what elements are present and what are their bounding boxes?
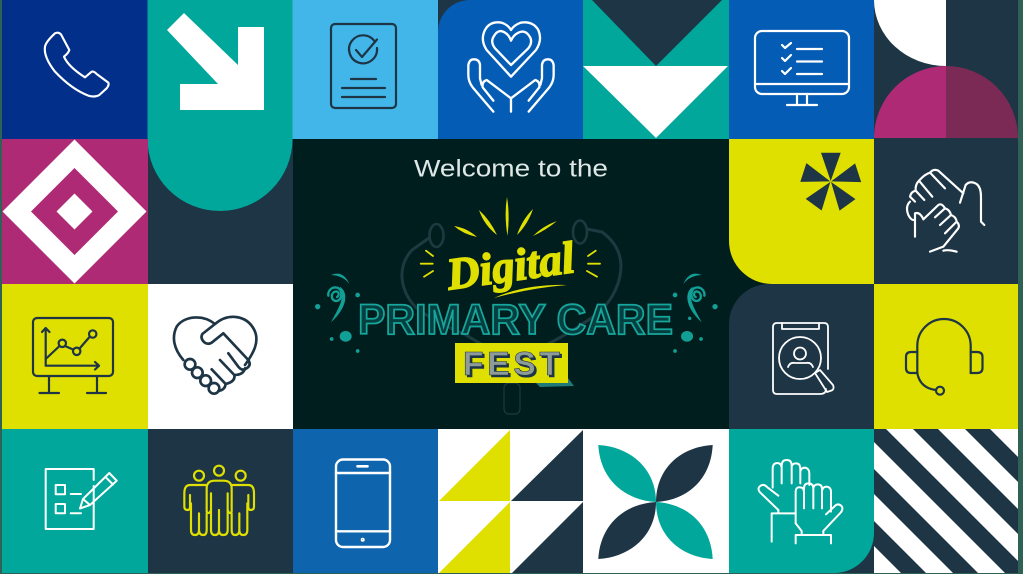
text: Digital script: Digital (443, 232, 578, 300)
tile: document check (292, 0, 438, 139)
icon: headset with microphone (906, 319, 982, 395)
icon: handshake forming a heart (174, 317, 256, 394)
tile: headset (874, 284, 1018, 429)
icon: monitor with checklist (755, 31, 849, 105)
icon: line chart on presentation board (33, 318, 113, 393)
icon: three people outline (184, 466, 254, 535)
tile: yellow with asterisk (729, 139, 874, 284)
icon: heart and hands (468, 22, 554, 112)
icon: checked document (331, 24, 396, 108)
text: Primary Care outlined: PRIMARY CARE (358, 297, 673, 344)
tile: form and pencil (2, 429, 148, 573)
icon: clipboard with magnifier (773, 323, 834, 394)
badge: Fest: FEST (463, 346, 561, 383)
tile: monitor checklist (729, 0, 874, 139)
tile: clasped hands (874, 139, 1018, 284)
tile: diagonal stripes (874, 429, 1018, 573)
tile: smartphone (293, 429, 438, 573)
tile: handshake heart (148, 284, 293, 429)
tile: chart board (2, 284, 148, 429)
illustration: faint stethoscope (402, 220, 621, 414)
tile: profile search (729, 284, 874, 429)
decoration: teal accent under badge (535, 378, 574, 387)
text: welcome line: Welcome to the (414, 156, 608, 183)
icon: diagonal white arrow (167, 13, 264, 110)
icon: checklist with pencil (46, 469, 117, 529)
icon: two raised hands (758, 460, 842, 543)
tile: heart in hands (438, 0, 583, 139)
tile: raised hands (729, 429, 874, 573)
icon: holding hands (907, 170, 984, 252)
tile: white quarter circle and magenta semicircle (874, 0, 1018, 139)
panel: central welcome area (293, 139, 729, 429)
decoration: yellow burst rays (421, 197, 600, 298)
tile: magenta diamond (2, 139, 148, 284)
tile: triangle pattern (438, 429, 583, 573)
icon: smartphone outline (336, 460, 390, 547)
decoration: right teal flourish (673, 274, 718, 353)
tile: phone (2, 0, 148, 139)
tile: dark backing with teal arch and arrow (148, 0, 293, 284)
tile: four petals (583, 429, 729, 573)
decoration: left teal flourish (315, 274, 360, 353)
tile: group of people (148, 429, 293, 573)
tile: teal with triangles (583, 0, 729, 139)
icon: five wedge asterisk (800, 153, 861, 211)
icon: telephone handset (45, 33, 109, 97)
